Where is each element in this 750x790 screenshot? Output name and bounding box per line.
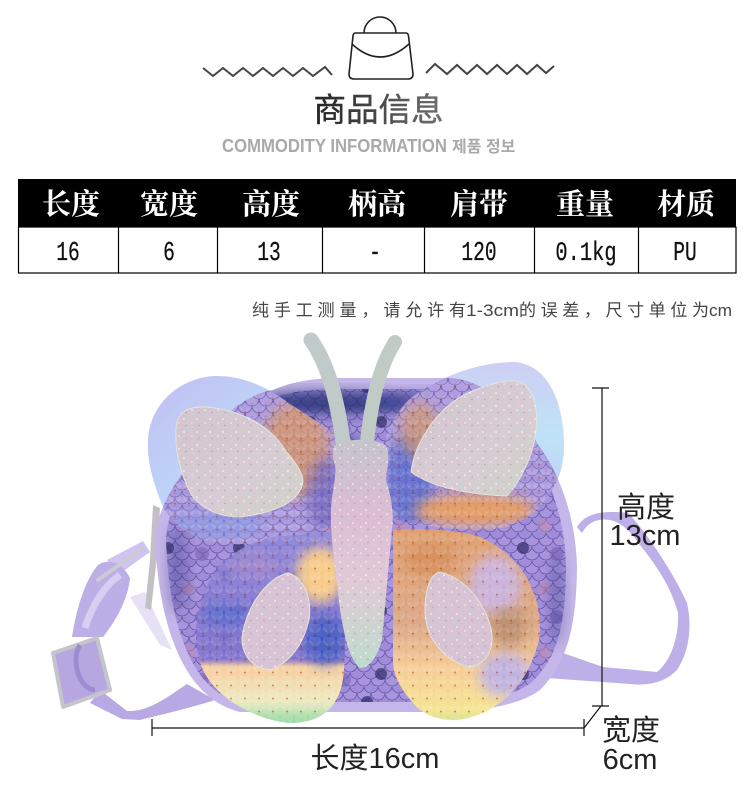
- table header labels: 材质: [657, 188, 715, 221]
- zigzag left: [203, 67, 332, 76]
- measurement note: cm: [709, 301, 732, 320]
- measurement note: 的误差，尺寸单位为: [519, 301, 709, 320]
- metal clasp charm: [145, 505, 160, 610]
- dimension label: width: 宽度: [602, 714, 660, 747]
- table values: 13: [257, 238, 281, 269]
- dimension lines: [152, 388, 609, 736]
- table values: PU: [673, 238, 697, 269]
- table values: 16: [56, 238, 80, 269]
- right wing: [385, 362, 564, 530]
- butterfly body and antennae: [311, 340, 395, 668]
- table header labels: 肩带: [450, 188, 508, 221]
- right lower wing: [390, 525, 545, 725]
- bag body with sequins: [155, 378, 577, 712]
- table values: [56, 238, 697, 269]
- table header labels: 宽度: [140, 187, 198, 221]
- table header labels: 长度: [42, 187, 100, 221]
- table values: 6: [163, 238, 175, 269]
- zigzag right: [426, 64, 554, 74]
- measurement note: 1-3cm: [466, 301, 519, 320]
- table header labels: 重量: [556, 188, 614, 221]
- dimension label: width: 6cm: [603, 744, 657, 776]
- glitter wing patches: [176, 381, 537, 670]
- shoulder strap right: [547, 512, 690, 684]
- icon: handbag: [349, 17, 413, 79]
- table values: 120: [461, 238, 497, 269]
- dimension label: height: 高度: [617, 491, 675, 524]
- upper holographic wings: [148, 362, 564, 544]
- dimension label: height: 13cm: [610, 520, 680, 552]
- specification table: [18, 179, 736, 273]
- header: commodity information: [203, 17, 554, 156]
- dimension label: width: [602, 714, 660, 776]
- left wing: [148, 376, 336, 544]
- measurement note: [252, 301, 732, 320]
- dimension label: length: 长度16cm: [311, 742, 439, 775]
- dimension label: height: [610, 491, 680, 552]
- measurement note: 纯手工测量，请允许有: [252, 301, 466, 320]
- shoulder strap left: [53, 541, 215, 720]
- table header labels: [42, 187, 715, 221]
- left lower wing: [190, 530, 350, 725]
- table values: -: [369, 238, 381, 269]
- product photo: butterfly sequin bag: [53, 340, 690, 725]
- table header labels: 柄高: [348, 188, 406, 221]
- table header labels: 高度: [242, 187, 300, 221]
- lower holographic wings: [190, 525, 545, 725]
- title: 商品信息: [313, 92, 444, 128]
- subtitle: COMMODITY INFORMATION: [222, 136, 447, 156]
- subtitle: 제품 정보: [452, 138, 516, 156]
- table values: 0.1kg: [555, 239, 617, 269]
